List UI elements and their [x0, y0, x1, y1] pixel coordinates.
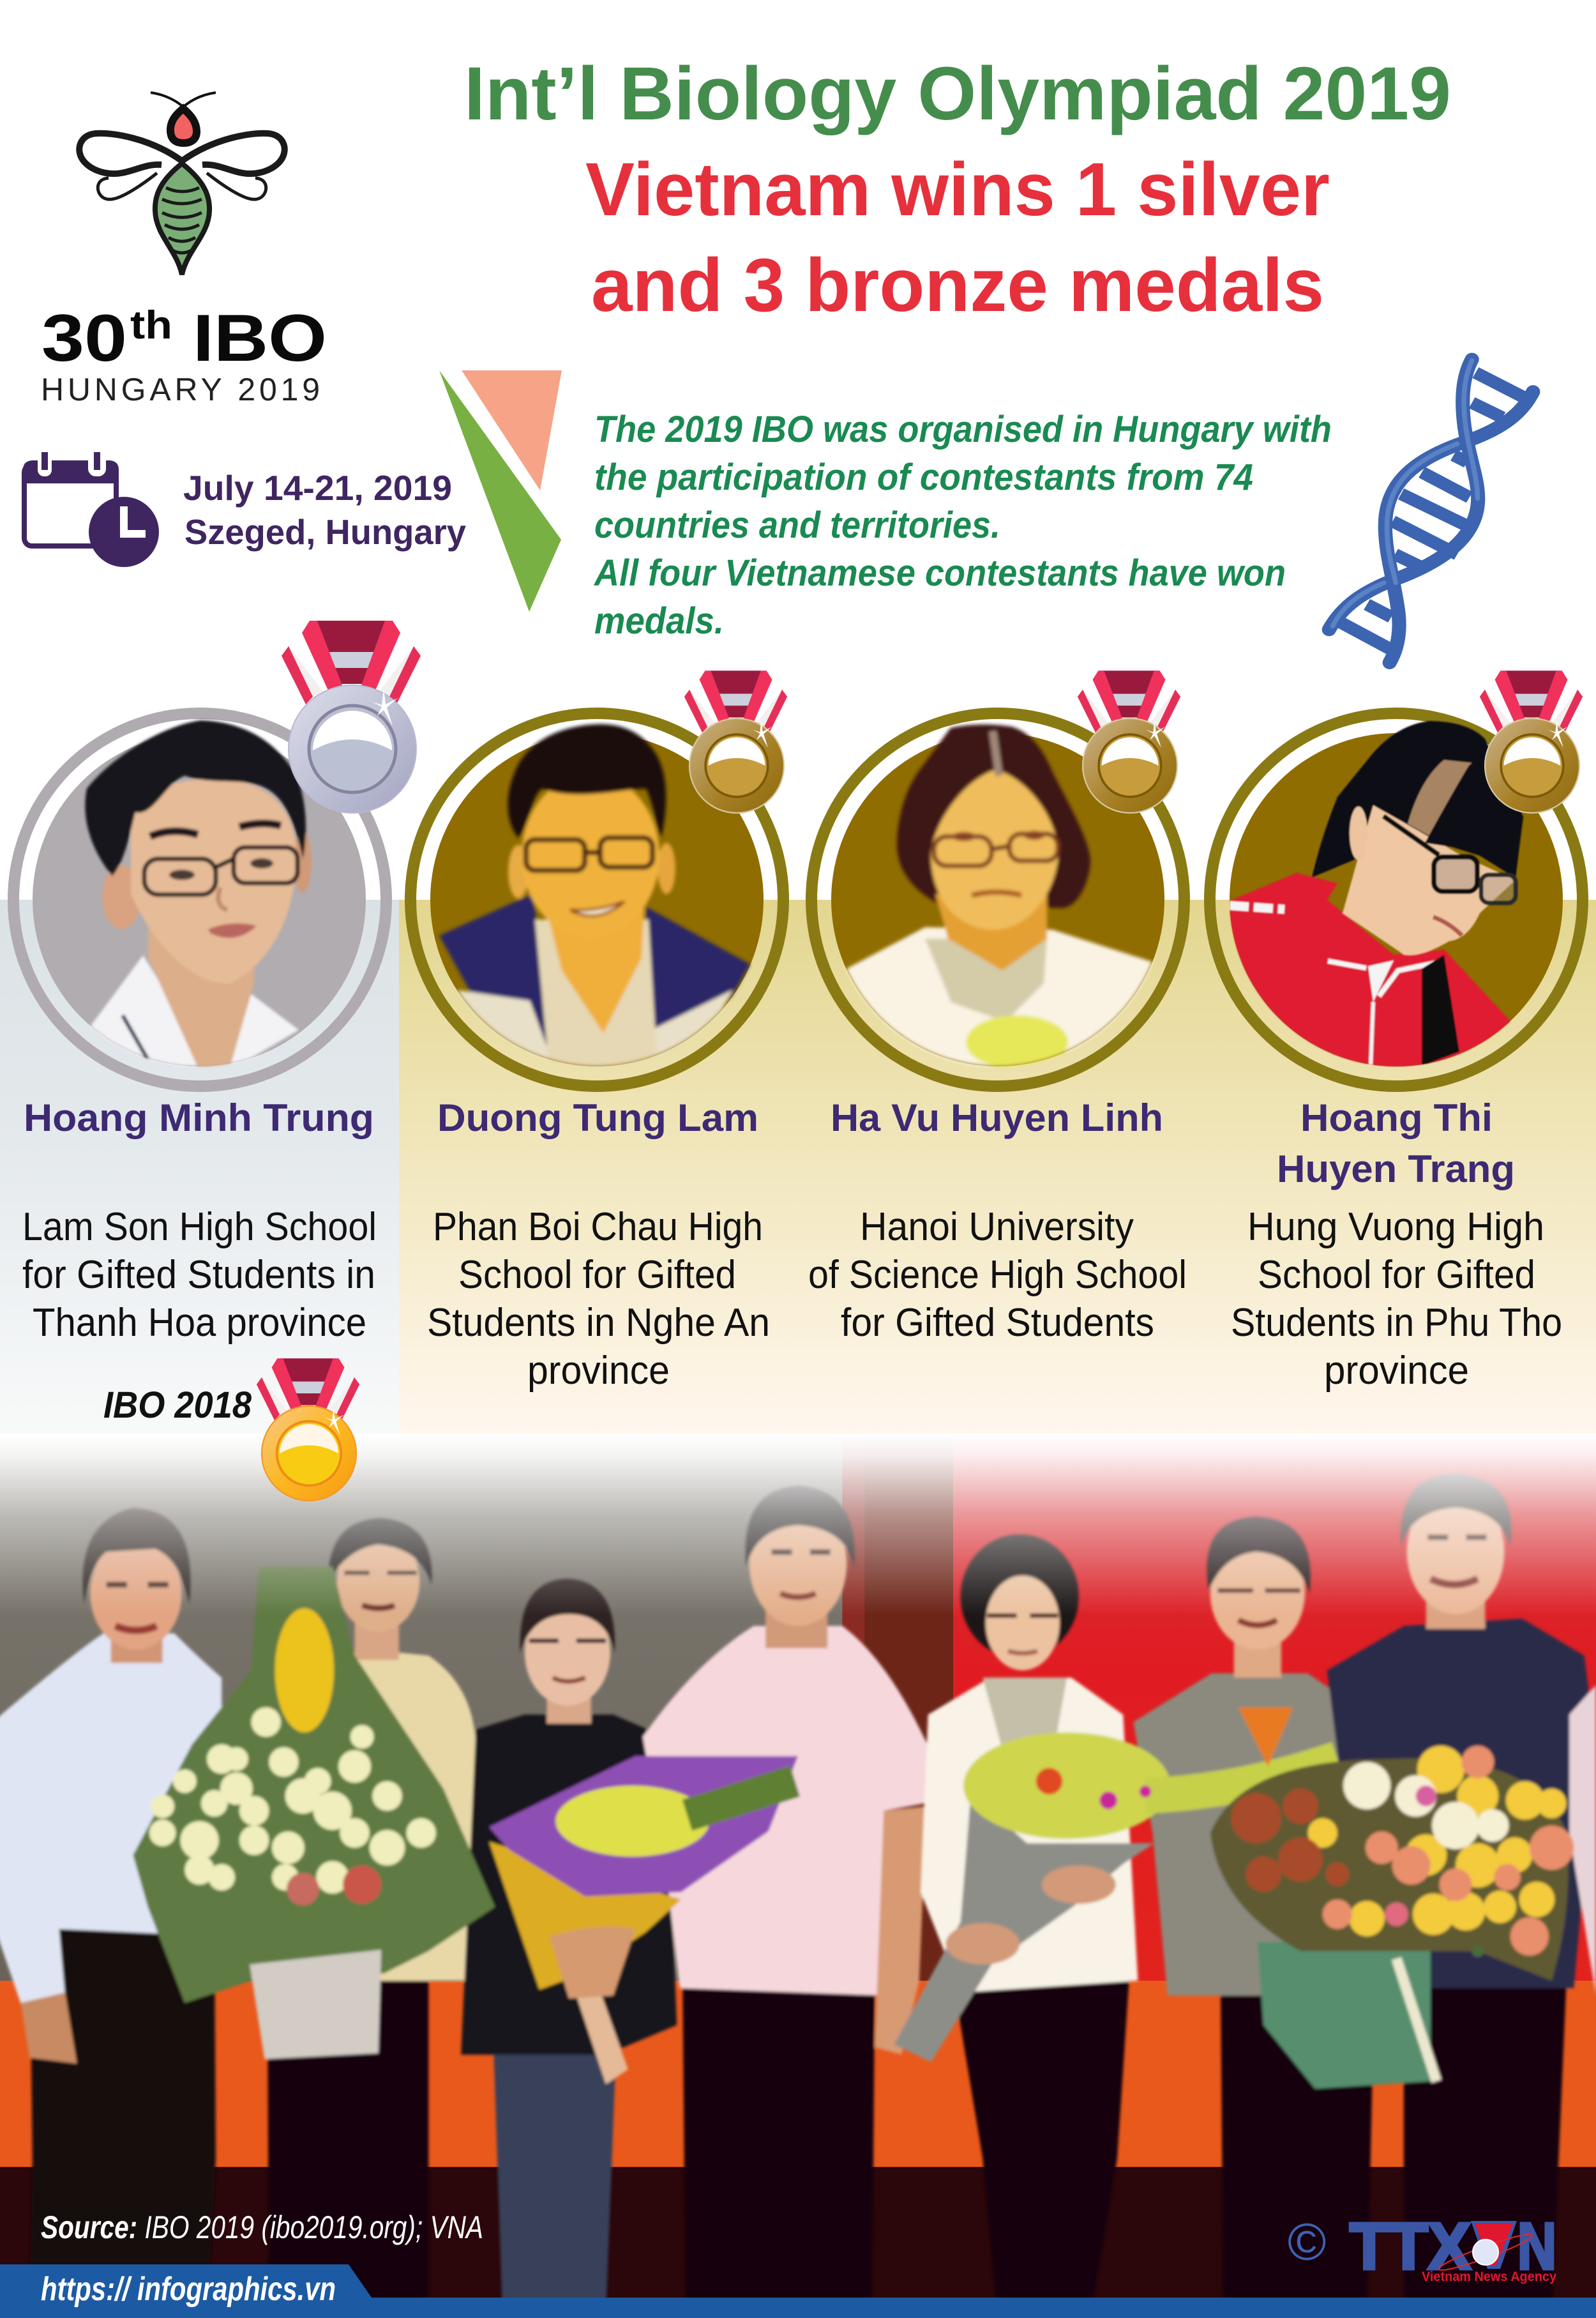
source line: Source: IBO 2019 (ibo2019.org); VNA — [41, 2209, 483, 2245]
logo: TTXVN Vietnam News Agency: Vietnam News Agency — [1422, 2269, 1556, 2284]
event date and place — [183, 468, 466, 552]
icon: DNA helix — [1329, 360, 1533, 663]
background bands: bronze medal columns — [399, 900, 1596, 1435]
names of contestants — [24, 1096, 1515, 1190]
IBO 2018 label: IBO 2018 — [103, 1384, 252, 1426]
school: Duong Tung Lam: Phan Boi Chau High — [433, 1205, 763, 1249]
school: Hoang Thi Huyen Trang: province — [1324, 1349, 1469, 1393]
portrait: Hoang Thi Huyen Trang — [1210, 713, 1583, 1086]
icon: calendar with clock — [23, 452, 159, 567]
school: Ha Vu Huyen Linh: for Gifted Students — [841, 1301, 1154, 1345]
school: Hoang Thi Huyen Trang: Hung Vuong High — [1247, 1205, 1544, 1249]
school: Duong Tung Lam — [427, 1205, 770, 1393]
logo text: 30th IBO Hungary 2019: HUNGARY 2019 — [41, 372, 320, 407]
names of contestants: Hoang Minh Trung — [24, 1096, 374, 1139]
footer bar — [0, 2264, 1596, 2318]
logo text: 30th IBO Hungary 2019 — [41, 301, 327, 407]
bouquet: grey wrapped flowers — [894, 1708, 1337, 2062]
young man in grey polo — [1133, 1517, 1386, 2318]
logo text: 30th IBO Hungary 2019: th — [130, 303, 172, 347]
school: Hoang Minh Trung — [22, 1205, 377, 1345]
group photo of medalists — [0, 1434, 1596, 2318]
portrait: Hoang Minh Trung — [13, 713, 386, 1086]
school: Hoang Thi Huyen Trang: Students in Phu Tho — [1231, 1301, 1562, 1345]
medal: gold IBO 2018 — [257, 1358, 359, 1501]
photo top fade — [0, 1434, 1596, 1616]
man in navy polo — [1327, 1474, 1596, 2318]
medal: bronze, Ha Vu Huyen Linh — [1078, 670, 1180, 813]
intro text: countries and territories. — [594, 504, 1000, 546]
intro text: All four Vietnamese contestants have won — [593, 552, 1286, 594]
medal: silver — [282, 621, 421, 813]
person at right edge — [1569, 1685, 1596, 1996]
portrait: Duong Tung Lam — [410, 713, 783, 1086]
school: Duong Tung Lam: Students in Nghe An — [427, 1301, 770, 1345]
intro text — [593, 409, 1332, 642]
title — [464, 52, 1451, 328]
logo: TTXVN Vietnam News Agency — [1350, 2209, 1556, 2284]
bouquet: multicolour flower basket — [1210, 1746, 1574, 2089]
school: Hoang Thi Huyen Trang — [1231, 1205, 1562, 1393]
logo: TTXVN Vietnam News Agency: TTX — [1350, 2209, 1471, 2283]
intro text: the participation of contestants from 74 — [594, 457, 1253, 498]
names of contestants: Duong Tung Lam — [437, 1096, 758, 1139]
young man behind flowers — [267, 1518, 476, 2318]
man in pink shirt — [643, 1485, 950, 2318]
event date and place: Szeged, Hungary — [184, 512, 466, 552]
background bands: silver medal column — [0, 900, 399, 1435]
logo text: 30th IBO Hungary 2019: 30 — [41, 301, 127, 375]
title: Int’l Biology Olympiad 2019 — [464, 52, 1451, 136]
website url: https:// infographics.vn — [41, 2271, 336, 2308]
intro text: medals. — [594, 600, 724, 642]
bouquet: purple and yellow wrapped flowers — [489, 1756, 798, 2084]
decorative triangles — [439, 370, 562, 612]
title: and 3 bronze medals — [591, 243, 1324, 328]
school: Hoang Minh Trung: Thanh Hoa province — [33, 1301, 366, 1345]
school: Hoang Minh Trung: for Gifted Students in — [22, 1253, 375, 1297]
school: Ha Vu Huyen Linh: of Science High School — [808, 1253, 1187, 1297]
event date and place: July 14-21, 2019 — [183, 468, 452, 508]
man at far left — [0, 1508, 222, 2318]
logo: IBO bee — [79, 93, 285, 275]
portrait: Ha Vu Huyen Linh — [811, 713, 1184, 1086]
medal: bronze, Hoang Thi Huyen Trang — [1480, 670, 1583, 813]
names of contestants: Huyen Trang — [1277, 1148, 1515, 1190]
girl in white blouse — [921, 1534, 1138, 2318]
medal: bronze, Duong Tung Lam — [684, 670, 787, 813]
school: Duong Tung Lam: province — [527, 1349, 670, 1393]
logo: TTXVN Vietnam News Agency: N — [1517, 2209, 1556, 2283]
names of contestants: Hoang Thi — [1300, 1096, 1493, 1139]
logo text: 30th IBO Hungary 2019: IBO — [193, 301, 327, 375]
copyright symbol: © — [1288, 2213, 1326, 2271]
school: Ha Vu Huyen Linh: Hanoi University — [860, 1205, 1134, 1249]
intro text: The 2019 IBO was organised in Hungary with — [594, 409, 1332, 450]
title: Vietnam wins 1 silver — [585, 148, 1330, 232]
school: Duong Tung Lam: School for Gifted — [458, 1253, 736, 1297]
names of contestants: Ha Vu Huyen Linh — [831, 1096, 1163, 1139]
bouquet: large flower basket — [133, 1567, 495, 2059]
school: Hoang Minh Trung: Lam Son High School — [22, 1205, 377, 1249]
girl with black shirt — [461, 1579, 677, 2315]
school: Ha Vu Huyen Linh — [808, 1205, 1187, 1345]
school: Hoang Thi Huyen Trang: School for Gifted — [1258, 1253, 1535, 1297]
